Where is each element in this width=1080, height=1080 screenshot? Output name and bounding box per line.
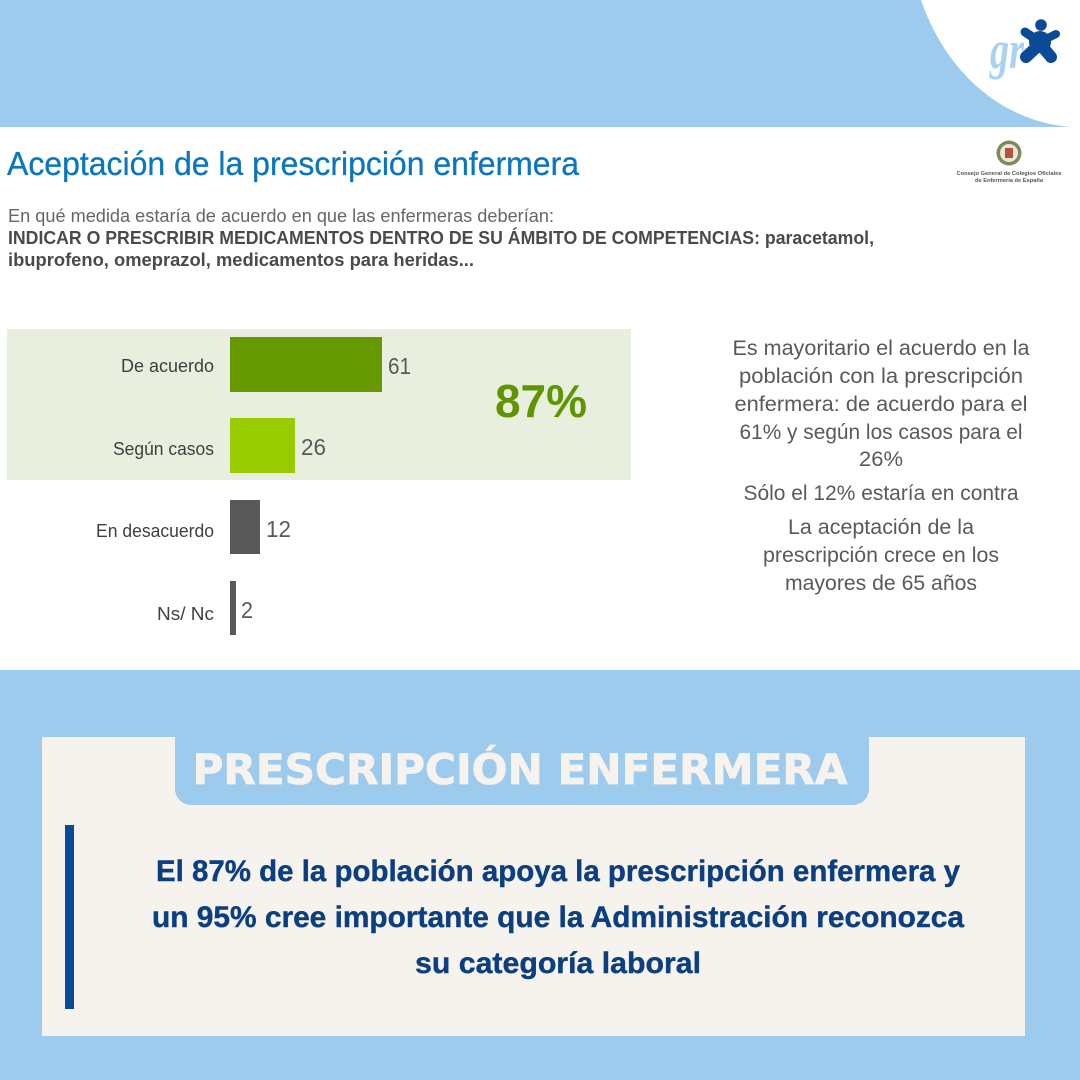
- commentary text: La aceptación de la: [788, 515, 974, 539]
- bar: ns/nc: Ns/ Nc: [157, 604, 214, 624]
- bar: en desacuerdo: [96, 500, 291, 554]
- survey question: [8, 206, 874, 270]
- headline text: El 87% de la población apoya la prescripción enfermera y: [156, 855, 960, 888]
- commentary text: 61% y según los casos para el: [740, 420, 1022, 444]
- logo lettering: gr: [989, 20, 1025, 80]
- commentary text: 26%: [859, 447, 903, 471]
- panel: survey slide: [0, 127, 1080, 670]
- icon: consejo general crest: Consejo General de Colegios Oficiales: [956, 171, 1062, 177]
- commentary text: mayores de 65 años: [785, 571, 977, 595]
- commentary text: enfermera: de acuerdo para el: [734, 392, 1028, 416]
- bar: según casos: [113, 418, 326, 473]
- survey question: En qué medida estaría de acuerdo en que las enfermeras deberían:: [8, 206, 554, 226]
- icon: person: [1025, 19, 1056, 57]
- bar chart: [7, 329, 631, 635]
- survey question: ibuprofeno, omeprazol, medicamentos para heridas...: [8, 250, 474, 270]
- bar: ns/nc: 2: [241, 597, 253, 623]
- bar: en desacuerdo: 12: [266, 516, 291, 542]
- commentary text: Es mayoritario el acuerdo en la: [732, 336, 1030, 360]
- bar: según casos: 26: [301, 434, 326, 460]
- total 87%: 87%: [495, 375, 587, 427]
- headline text: un 95% cree importante que la Administración reconozca: [152, 901, 964, 934]
- headline text: su categoría laboral: [415, 947, 701, 980]
- commentary text: población con la prescripción: [739, 364, 1023, 388]
- bar: ns/nc: [157, 581, 253, 635]
- bar: según casos: Según casos: [113, 439, 214, 459]
- bar: en desacuerdo: En desacuerdo: [96, 521, 214, 541]
- slide title: Aceptación de la prescripción enfermera: [7, 145, 580, 182]
- commentary text: [732, 336, 1030, 595]
- logo corner: [921, 0, 1080, 127]
- panel: headline card: [42, 724, 1025, 1036]
- commentary text: prescripción crece en los: [763, 543, 999, 567]
- bar: de acuerdo: 61: [388, 353, 411, 379]
- headline text: [152, 855, 964, 980]
- bar: de acuerdo: De acuerdo: [121, 356, 214, 376]
- survey question: INDICAR O PRESCRIBIR MEDICAMENTOS DENTRO DE SU ÁMBITO DE COMPETENCIAS: paracetamol,: [8, 227, 874, 248]
- commentary text: Sólo el 12% estaría en contra: [744, 481, 1019, 505]
- accent bar: [65, 825, 74, 1009]
- bar: de acuerdo: [121, 337, 411, 392]
- heading pill: [175, 724, 869, 805]
- icon: consejo general crest: de Enfermería de España: [975, 178, 1043, 184]
- icon: consejo general crest: [956, 140, 1062, 184]
- heading pill: PRESCRIPCIÓN ENFERMERA: [192, 744, 848, 794]
